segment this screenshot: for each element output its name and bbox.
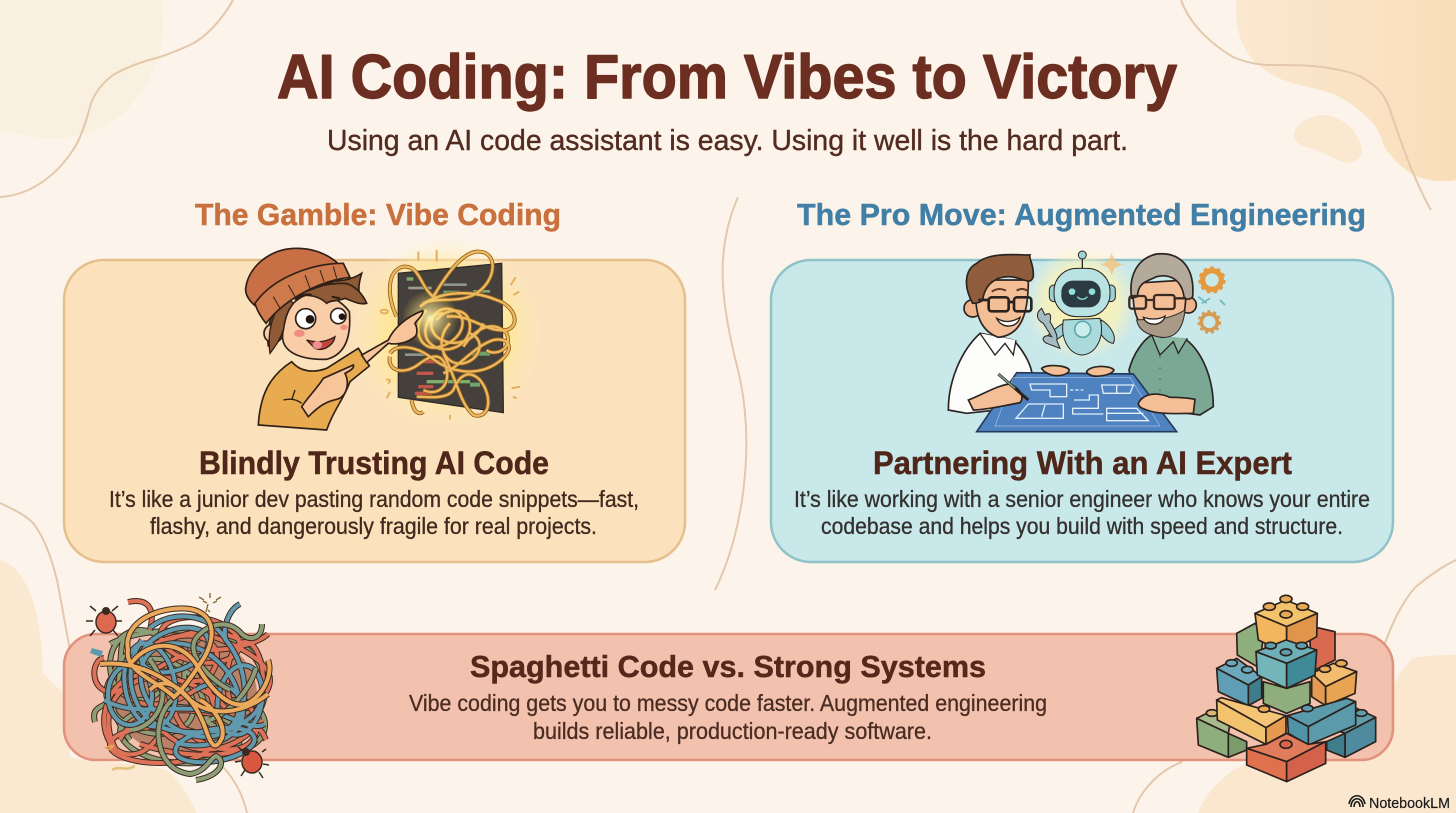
panel: augmented engineering xyxy=(771,260,1393,562)
icon: developer pointing at tangled screen xyxy=(246,237,543,430)
man right head xyxy=(1180,297,1196,313)
blueprint xyxy=(977,373,1177,432)
panel body: augmented engineering: codebase and helps you build with speed and structure. xyxy=(821,513,1343,539)
panel: vibe coding xyxy=(64,260,685,562)
hands on table xyxy=(1042,366,1069,376)
man left body xyxy=(948,333,1032,413)
panel: comparison banner xyxy=(64,634,1393,760)
panel body: vibe coding: It’s like a junior dev pasting random code snippets—fast, xyxy=(109,486,639,512)
title: AI Coding: From Vibes to Victory xyxy=(277,43,1177,112)
banner body xyxy=(409,690,1047,744)
panel body: augmented engineering xyxy=(794,486,1370,539)
robot xyxy=(1080,258,1084,268)
icon: spaghetti code tangle xyxy=(86,593,277,780)
developer hair back xyxy=(268,273,367,347)
watermark: NotebookLM: NotebookLM xyxy=(1369,795,1450,812)
developer body xyxy=(258,348,369,430)
man left head xyxy=(964,300,981,317)
panel body: augmented engineering: It’s like working with a senior engineer who knows your entire xyxy=(794,486,1370,512)
icon: lego brick stack xyxy=(1197,595,1376,782)
panel body: vibe coding: flashy, and dangerously fragile for real projects. xyxy=(150,513,597,539)
icon: ladybug bottom xyxy=(235,747,269,778)
banner body: builds reliable, production-ready software. xyxy=(533,718,932,744)
panel heading: partnering: Partnering With an AI Expert xyxy=(873,445,1292,481)
icon: two engineers with robot and blueprint xyxy=(948,247,1225,432)
developer beanie xyxy=(246,248,347,308)
panel body: vibe coding xyxy=(109,486,639,539)
icon: ladybug top xyxy=(86,606,122,636)
panel heading: blindly trusting: Blindly Trusting AI Code xyxy=(199,445,549,481)
wrench xyxy=(1037,308,1060,348)
man right body xyxy=(1129,335,1213,415)
banner body: Vibe coding gets you to messy code faster. Augmented engineering xyxy=(409,690,1047,716)
subtitle: Using an AI code assistant is easy. Using it well is the hard part. xyxy=(327,125,1128,157)
developer face xyxy=(283,294,350,359)
heading: the gamble: The Gamble: Vibe Coding xyxy=(195,197,561,232)
banner heading: Spaghetti Code vs. Strong Systems xyxy=(470,649,986,684)
icon: gears xyxy=(1199,268,1224,333)
heading: the pro move: The Pro Move: Augmented Engineering xyxy=(797,197,1366,232)
